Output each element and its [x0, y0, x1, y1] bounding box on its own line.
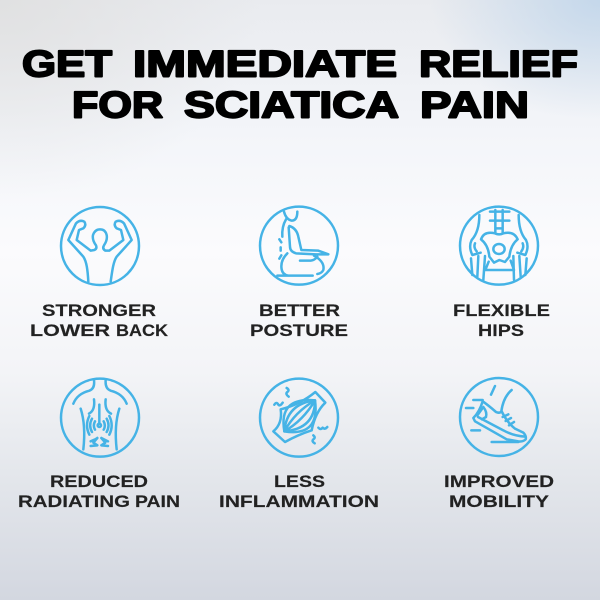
label: MOBILITY: [449, 492, 549, 511]
icon: running shoe: [460, 378, 538, 456]
label: LESS: [274, 472, 325, 491]
icon: pelvis and spine: [460, 207, 538, 285]
title: SCIATICA: [184, 84, 399, 126]
label: LOWER: [30, 321, 110, 340]
label: RADIATING: [18, 492, 130, 511]
benefit: improved mobility: [444, 378, 554, 511]
benefit: less inflammation: [219, 379, 379, 511]
label: IMPROVED: [444, 472, 554, 491]
label: BETTER: [259, 301, 340, 320]
label: BACK: [116, 321, 168, 340]
icon: flexing torso: [61, 207, 139, 285]
title: RELIEF: [419, 44, 578, 84]
label: FLEXIBLE: [453, 301, 550, 320]
label: INFLAMMATION: [219, 492, 379, 511]
label: [453, 301, 550, 340]
title: [22, 44, 578, 126]
benefit: stronger lower back: [30, 207, 168, 340]
icon: back with radiating pain: [61, 379, 139, 457]
label: [219, 472, 379, 511]
icon: seated posture: [260, 207, 338, 285]
benefit: better posture: [250, 207, 348, 340]
label: [30, 301, 168, 340]
title: PAIN: [420, 84, 529, 126]
label: [444, 472, 554, 511]
icon: inflamed muscle: [260, 379, 338, 457]
label: POSTURE: [250, 321, 348, 340]
title: FOR: [72, 84, 163, 126]
label: [18, 472, 180, 511]
label: REDUCED: [50, 472, 148, 491]
label: [250, 301, 348, 340]
benefit: flexible hips: [453, 207, 550, 340]
label: PAIN: [135, 492, 180, 511]
benefit: reduced radiating pain: [18, 379, 180, 511]
title: IMMEDIATE: [133, 44, 397, 84]
title: GET: [22, 44, 112, 84]
label: HIPS: [478, 321, 524, 340]
label: STRONGER: [42, 301, 156, 320]
